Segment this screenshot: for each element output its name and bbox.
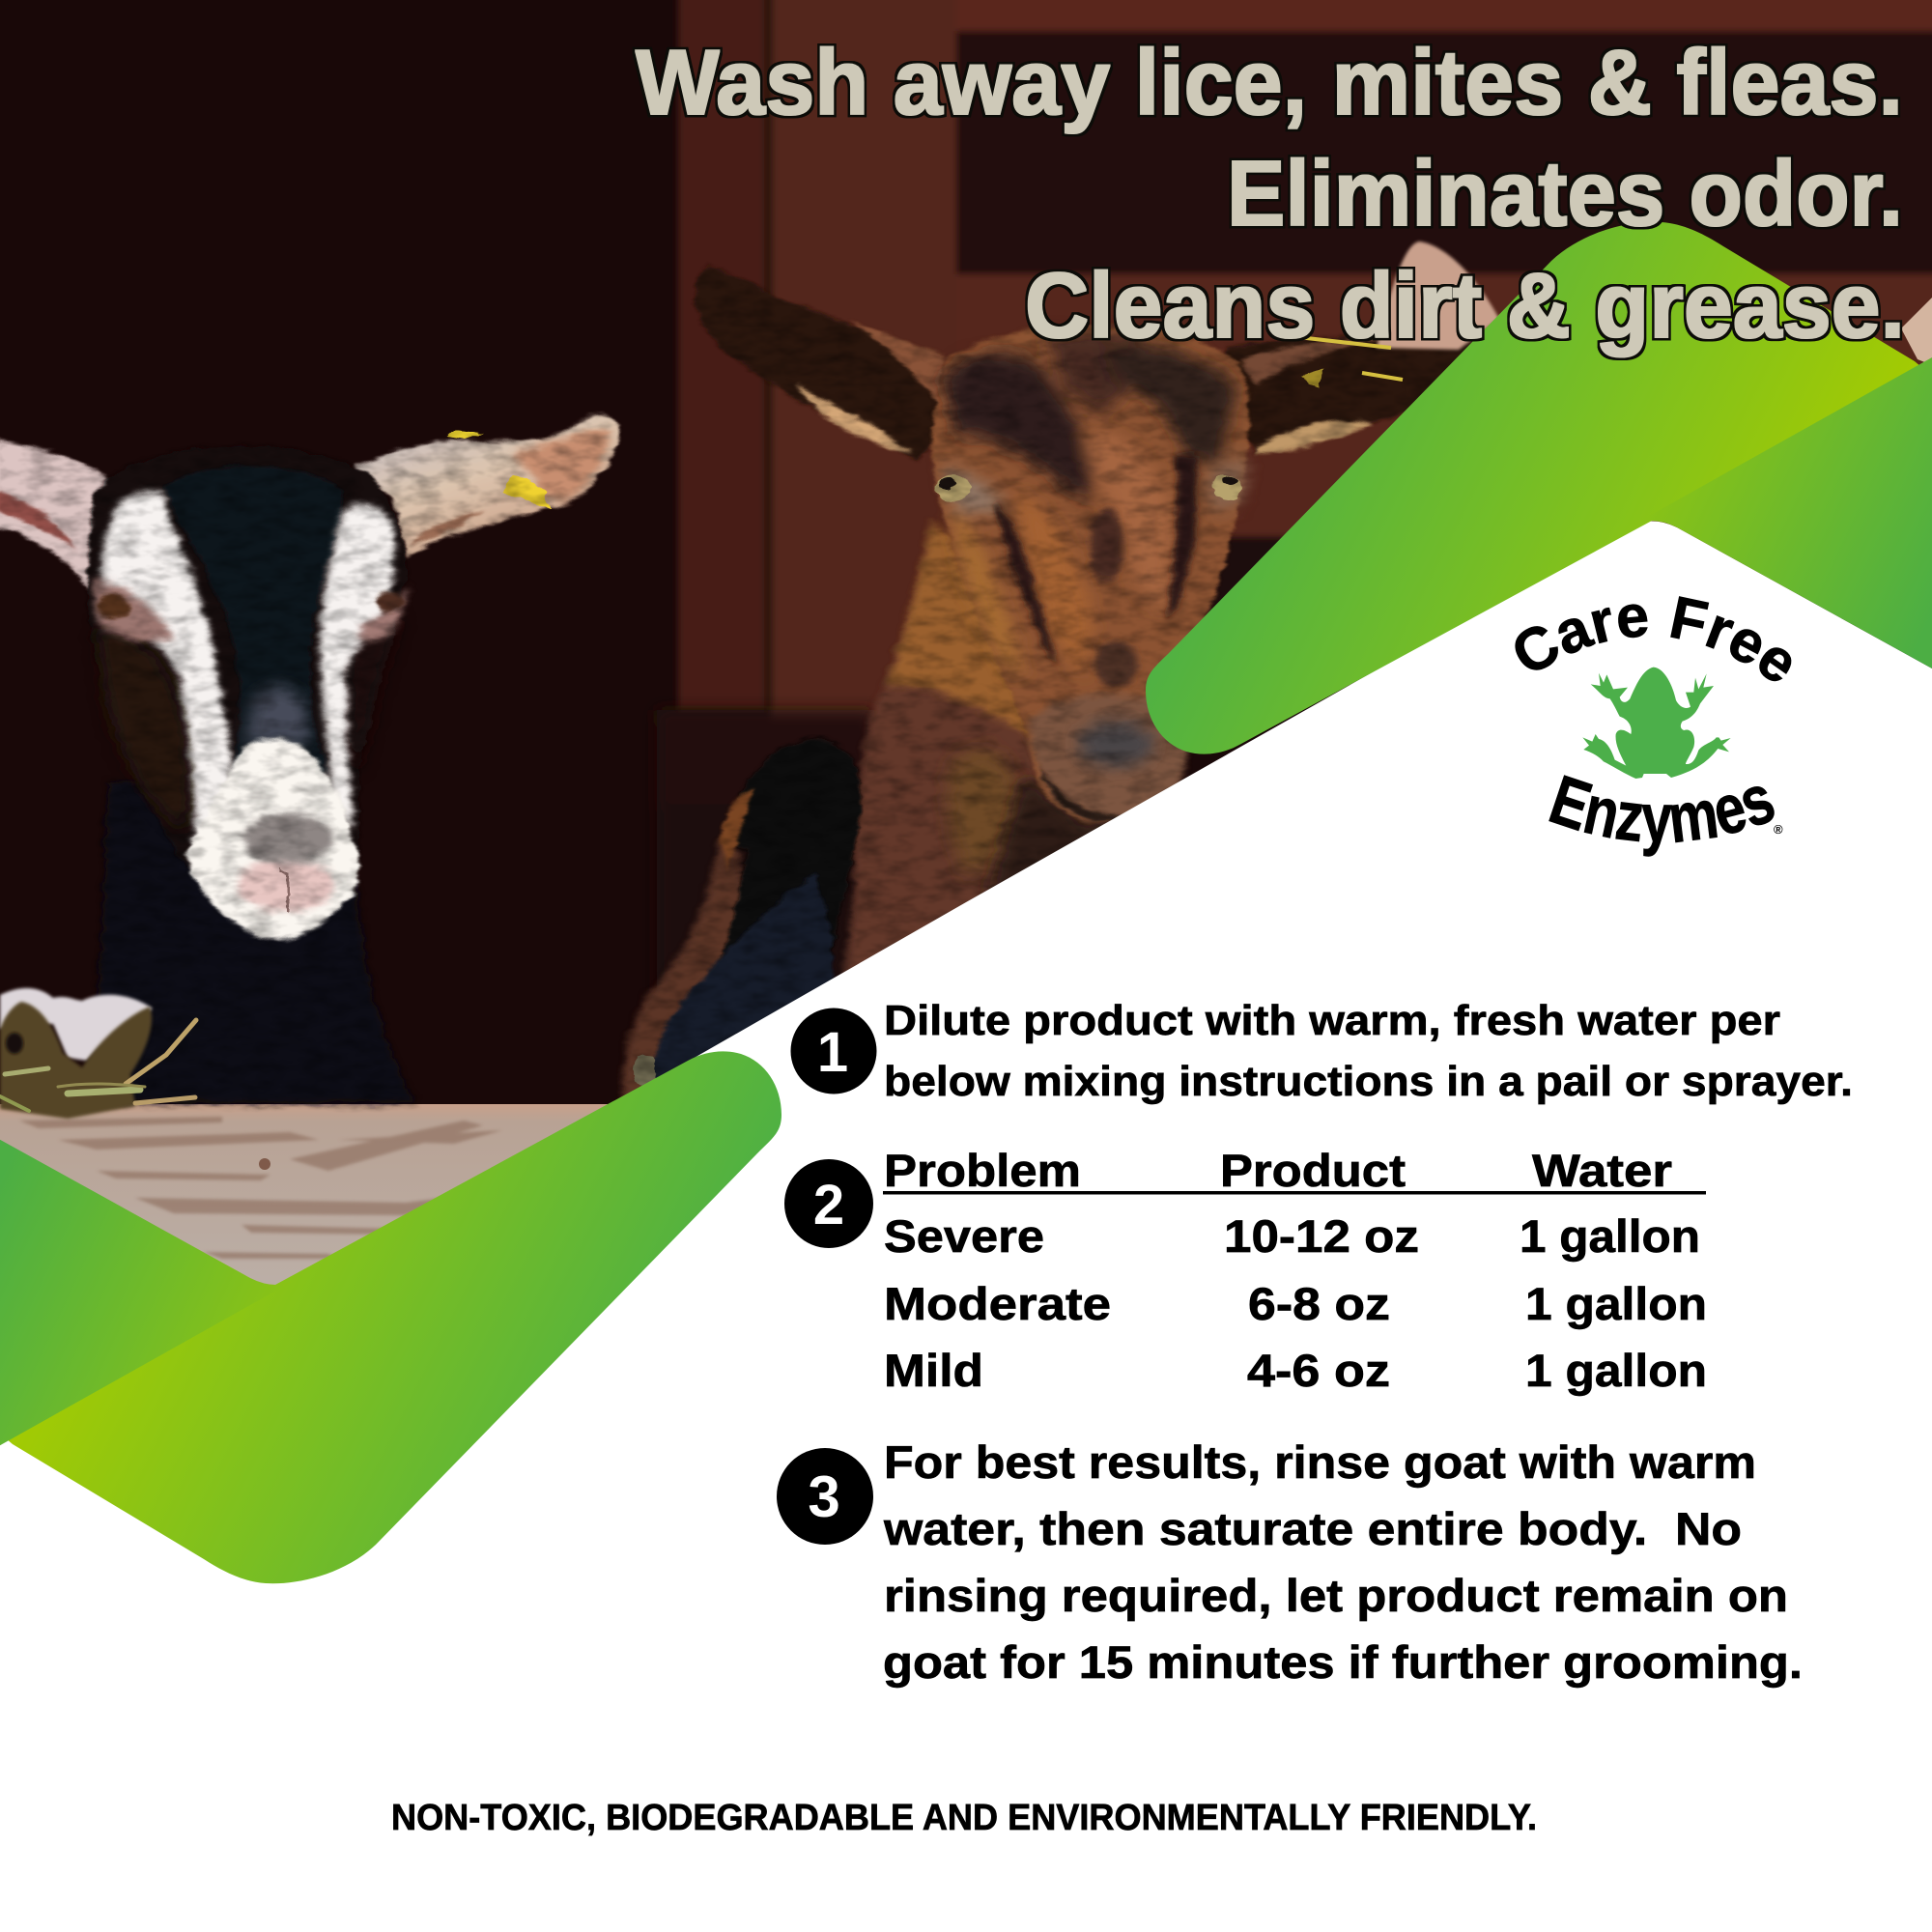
row: mild xyxy=(884,1345,1707,1396)
icon: green frog xyxy=(1582,668,1731,779)
hay pile xyxy=(0,988,196,1119)
row: moderate xyxy=(884,1278,1707,1329)
table header: Problem xyxy=(884,1145,1081,1196)
lower left green chevron xyxy=(0,1137,298,1448)
mixing table xyxy=(883,1145,1707,1396)
right ear xyxy=(355,414,618,556)
table header: Product xyxy=(1220,1145,1406,1196)
step 3 text: goat for 15 minutes if further grooming. xyxy=(883,1636,1803,1688)
row: mild: 4-6 oz xyxy=(1247,1345,1390,1396)
black blaze xyxy=(164,465,344,773)
step 1 text: Dilute product with warm, fresh water per xyxy=(884,997,1780,1044)
logo: Care Free Enzymes xyxy=(1515,596,1791,857)
face fur patches xyxy=(942,333,1246,676)
headline: Wash away lice, mites & fleas. xyxy=(636,31,1903,134)
lower left green leaf shape xyxy=(0,1051,781,1583)
background: barn photo xyxy=(0,0,1932,1317)
photo: black and white goat xyxy=(0,414,618,1103)
left ear xyxy=(0,439,108,589)
head base xyxy=(88,446,407,869)
logo text: Care Free: Care Free xyxy=(1515,596,1791,682)
row: severe: Severe xyxy=(884,1210,1044,1262)
headline xyxy=(636,31,1905,357)
eyes xyxy=(936,473,1241,501)
head xyxy=(931,326,1249,822)
white wool on hay xyxy=(0,988,153,1061)
headline: Cleans dirt & grease. xyxy=(1025,254,1905,357)
row: mild: Mild xyxy=(884,1345,983,1396)
logo text: Enzymes: Enzymes xyxy=(1548,775,1775,857)
row: moderate: 1 gallon xyxy=(1525,1278,1707,1329)
row: moderate: 6-8 oz xyxy=(1248,1278,1390,1329)
step 3 badge xyxy=(777,1448,873,1545)
chest and neck xyxy=(831,541,1246,1092)
ear tag xyxy=(503,476,550,510)
white content panel xyxy=(0,521,1932,1932)
step 2 badge xyxy=(784,1159,873,1248)
barn wood columns xyxy=(678,0,1932,734)
step 3 text: water, then saturate entire body. No xyxy=(883,1503,1742,1554)
photo: small black kid goat xyxy=(622,739,862,1106)
muzzle xyxy=(187,739,359,939)
row: severe: 10-12 oz xyxy=(1224,1210,1419,1262)
photo: brown goat xyxy=(695,267,1478,1092)
step 2 badge: 2 xyxy=(813,1174,844,1236)
step 3 text: For best results, rinse goat with warm xyxy=(884,1436,1756,1488)
upper right green chevron xyxy=(1629,357,1932,668)
muzzle and nose xyxy=(1030,695,1187,822)
table header: Water xyxy=(1532,1145,1672,1196)
dark face stripes xyxy=(995,454,1198,688)
right white stripe xyxy=(320,504,395,831)
right ear xyxy=(1225,333,1478,454)
step 1 text xyxy=(884,997,1853,1105)
step 3 badge: 3 xyxy=(808,1464,840,1529)
table header xyxy=(883,1145,1706,1196)
step 1 badge xyxy=(790,1009,877,1094)
footer claim: NON-TOXIC, BIODEGRADABLE AND ENVIRONMENTALLY FRIENDLY. xyxy=(391,1798,1537,1838)
row: mild: 1 gallon xyxy=(1525,1345,1707,1396)
step 3 text xyxy=(883,1436,1803,1688)
row: severe: 1 gallon xyxy=(1520,1210,1700,1262)
photo: third goat ear tips xyxy=(1298,242,1932,380)
step 1 text: below mixing instructions in a pail or sprayer. xyxy=(884,1058,1853,1105)
row: severe xyxy=(884,1210,1700,1262)
registered mark: ® xyxy=(1774,822,1783,837)
step 3 text: rinsing required, let product remain on xyxy=(884,1570,1788,1621)
neck xyxy=(85,773,415,1103)
fence plank xyxy=(0,1104,696,1317)
headline: Eliminates odor. xyxy=(1227,142,1903,245)
left ear xyxy=(695,267,952,462)
eyes xyxy=(98,595,130,618)
upper right green leaf shape xyxy=(1146,222,1927,754)
left white stripe xyxy=(101,491,232,850)
step 1 badge: 1 xyxy=(817,1021,848,1084)
row: moderate: Moderate xyxy=(884,1278,1111,1329)
